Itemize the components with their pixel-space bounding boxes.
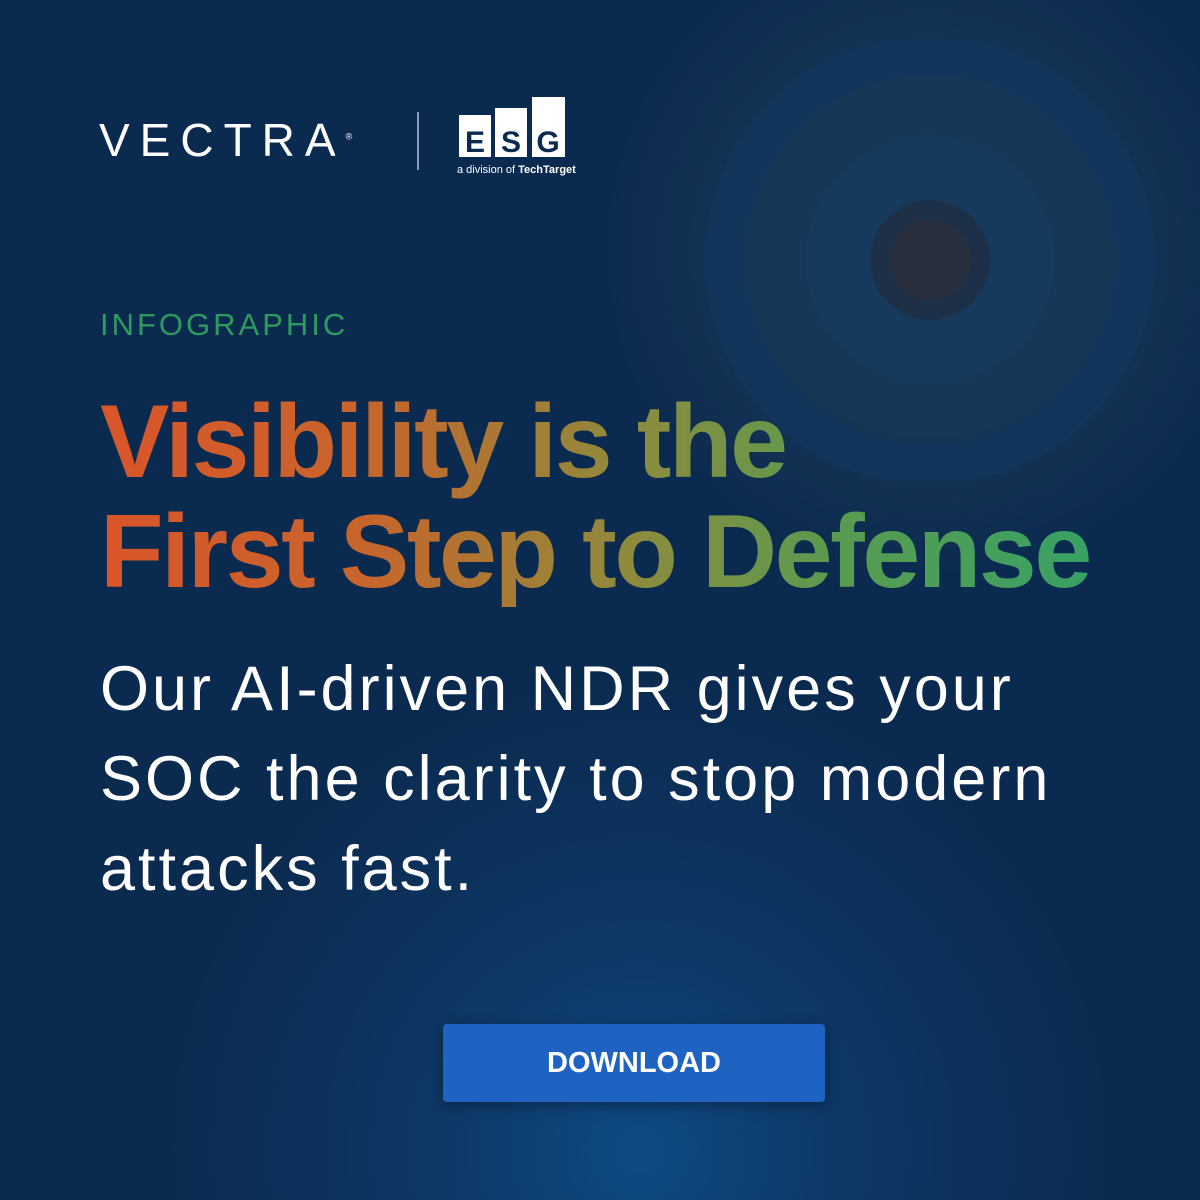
decorative lens circle bbox=[705, 40, 1154, 480]
subtitle text: attacks fast. bbox=[100, 834, 475, 904]
logo divider bbox=[417, 112, 419, 170]
subtitle text: SOC the clarity to stop modern bbox=[100, 744, 1051, 814]
title bbox=[100, 387, 1150, 607]
title: First Step to Defense bbox=[100, 494, 1090, 610]
subtitle text: Our AI-driven NDR gives your bbox=[100, 654, 1014, 724]
download button bbox=[443, 1024, 825, 1102]
logo: ESG: a division of TechTarget bbox=[457, 164, 576, 176]
subtitle text bbox=[100, 654, 1051, 904]
logo: ESG bbox=[457, 97, 576, 176]
download button: DOWNLOAD bbox=[547, 1046, 721, 1078]
title: Visibility is the bbox=[100, 384, 786, 500]
label: infographic: INFOGRAPHIC bbox=[100, 307, 348, 342]
logo: Vectra: VECTRA® bbox=[99, 114, 352, 166]
